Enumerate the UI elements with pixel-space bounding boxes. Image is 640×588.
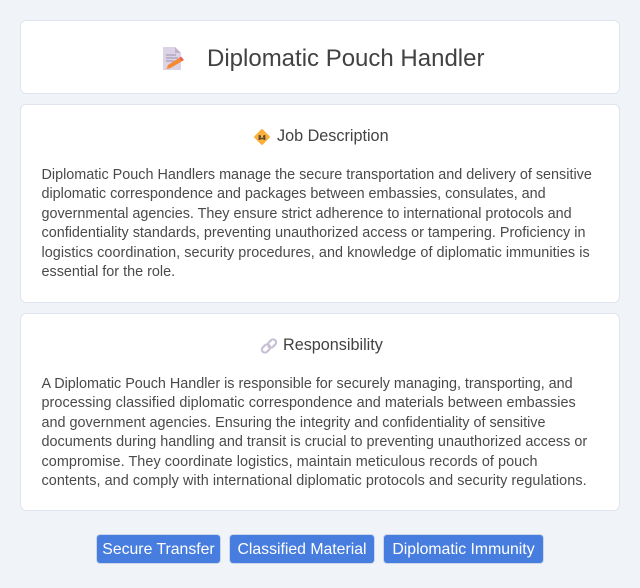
heading: job description: Job Description <box>277 127 389 145</box>
job description text: diplomatic correspondence and packages between embassies, consulates, and <box>42 186 546 202</box>
responsibility text: and government agencies. Ensuring the integrity and confidentiality of sensitive <box>42 414 545 430</box>
icon: chain link <box>260 338 278 354</box>
tag: classified material <box>229 534 375 564</box>
panel: job description <box>20 104 620 303</box>
responsibility text: documents during handling and transit is crucial to preventing unauthorized access or <box>42 434 587 450</box>
responsibility text <box>42 376 587 489</box>
heading: responsibility: Responsibility <box>283 336 383 354</box>
icon: document with pencil <box>163 47 184 70</box>
job description text: Diplomatic Pouch Handlers manage the secure transportation and delivery of sensitive <box>42 166 592 182</box>
tag: diplomatic immunity <box>383 534 544 564</box>
job description text: logistics coordination, security procedures, and knowledge of diplomatic immunities is <box>42 244 590 260</box>
job description text <box>42 166 592 280</box>
icon: diamond sign <box>254 129 270 145</box>
panel: responsibility <box>20 313 620 511</box>
responsibility text: contents, and comply with international diplomatic protocols and security regulations. <box>42 473 587 489</box>
title: Diplomatic Pouch Handler <box>207 45 484 72</box>
tag: diplomatic immunity: Diplomatic Immunity <box>392 541 535 558</box>
job description text: confidentiality standards, preventing unauthorized access or tampering. Proficiency in <box>42 225 585 241</box>
responsibility text: compromise. They coordinate logistics, maintain meticulous records of pouch <box>42 454 538 470</box>
responsibility text: processing classified diplomatic correspondence and materials between embassies <box>42 395 576 411</box>
responsibility text: A Diplomatic Pouch Handler is responsible for securely managing, transporting, and <box>42 376 573 392</box>
header panel <box>20 20 620 94</box>
tag: classified material: Classified Material <box>237 541 367 558</box>
tag: secure transfer: Secure Transfer <box>102 541 215 558</box>
tag: secure transfer <box>96 534 221 564</box>
job description text: governmental agencies. They ensure strict adherence to international protocols and <box>42 206 572 222</box>
job description text: essential for the role. <box>42 264 175 280</box>
